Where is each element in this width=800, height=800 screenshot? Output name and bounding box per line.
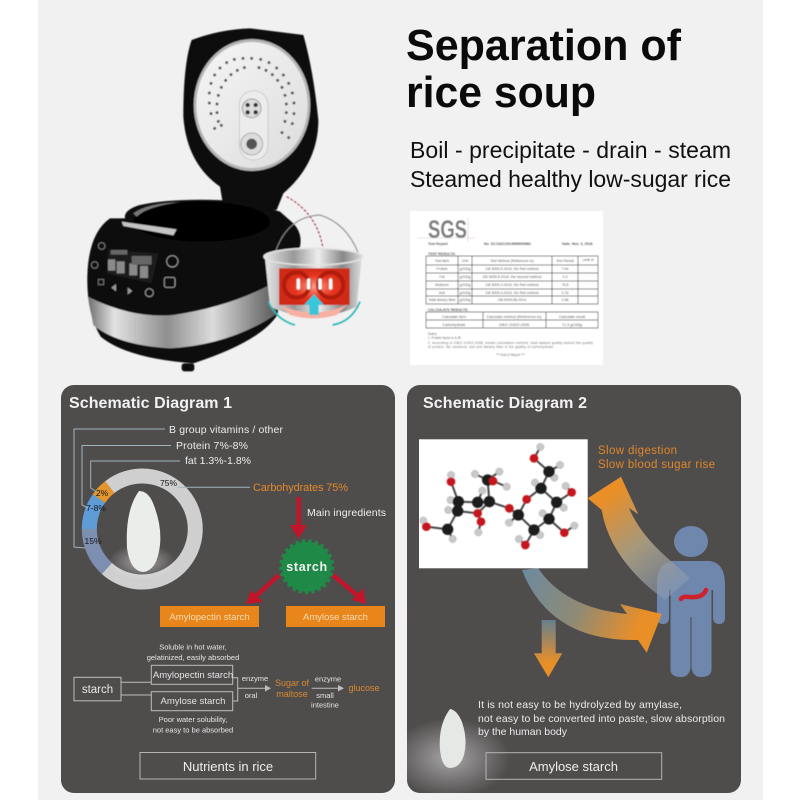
title: Separation of <box>406 21 681 70</box>
SGS test report document: GB 5009.6-2016, the second method <box>483 275 541 279</box>
SGS test report document: Limit of <box>582 258 594 262</box>
icon: rice grain <box>108 491 176 580</box>
composition labels: B group vitamins / other <box>169 424 284 436</box>
composition labels: Protein 7%-8% <box>176 440 248 452</box>
SGS test report document: 0.4 <box>562 275 568 279</box>
SGS test report document: g/100g <box>460 267 470 271</box>
SGS test report document: No. SZJ18111914059533981 <box>484 242 531 246</box>
text block: amylose description: It is not easy to be hydrolyzed by amylase, <box>478 699 682 711</box>
arrow: carbohydrates to starch <box>290 497 307 539</box>
arrow: starch to amylopectin <box>246 575 279 604</box>
SGS test report document: Total dietary fiber <box>428 298 456 302</box>
SGS test report document: CALCULATE RESULTS: <box>428 308 468 312</box>
icon: rice grain with glow <box>407 709 504 793</box>
SGS test report document: 7.64 <box>562 267 568 271</box>
flow diagram: starch digestion: small <box>316 691 334 700</box>
SGS test report document: 1. Protein factor is 6.25 <box>428 336 461 340</box>
flow diagram: starch digestion: oral <box>245 691 258 700</box>
flow diagram: starch digestion: Poor water solubility, <box>159 715 227 724</box>
SGS test report document: GB 5009.4-2016, the first method <box>485 291 539 295</box>
SGS test report document <box>410 211 603 365</box>
SGS test report document: TEST RESULTS: <box>428 252 456 256</box>
flow diagram: starch digestion <box>74 642 380 734</box>
SGS test report document: Fat <box>439 275 445 279</box>
label: carbohydrates 75%: Carbohydrates 75% <box>253 482 348 494</box>
box: amylose starch: Amylose starch <box>303 612 368 623</box>
SGS test report document: Ash <box>439 291 445 295</box>
text block: amylose description <box>478 699 725 738</box>
heading: schematic diagram 2: Schematic Diagram 2 <box>423 395 587 412</box>
SGS test report document: *** End of Report *** <box>496 353 526 357</box>
arrow: starch to amylose <box>333 575 366 604</box>
subtitle <box>410 137 731 192</box>
SGS test report document: GB/Z 21922-2008 <box>499 323 529 327</box>
SGS test report document: 2. According to GB/Z 21922-2008, known calculation method, total sample quality deduct the quality <box>428 341 593 345</box>
SGS test report document: of protein, fat, moisture, ash and dietary fiber is the quality of carbohydrate <box>428 345 553 349</box>
badge: starch <box>281 541 332 592</box>
donut chart: rice composition: 75% <box>160 478 177 488</box>
icon: stomach <box>681 590 706 599</box>
SGS test report document: Test Result <box>556 259 574 263</box>
heading: schematic diagram 1: Schematic Diagram 1 <box>69 395 232 412</box>
title <box>406 21 681 117</box>
SGS test report document: Notes: <box>428 332 437 336</box>
panel: schematic diagram 1 <box>61 385 395 793</box>
donut chart: rice composition: 2% <box>96 488 109 498</box>
subtitle: Boil - precipitate - drain - steam <box>410 137 731 163</box>
SGS test report document: GB 5009.88-2014 <box>498 298 526 302</box>
label: slow digestion: Slow blood sugar rise <box>598 459 715 471</box>
SGS test report document: Calculate result <box>559 315 586 319</box>
arrow: down to amylose <box>534 620 562 677</box>
SGS test report document: GB 5009.3-2016, the first method <box>485 283 539 287</box>
SGS test report document: Test item <box>435 259 449 263</box>
caption box: amylose starch <box>486 753 662 779</box>
flow diagram: starch digestion: Amylose starch <box>161 696 225 707</box>
composition labels <box>169 424 284 467</box>
SGS test report document: Date: Nov. 3, 2018 <box>562 242 592 246</box>
flow diagram: starch digestion: enzyme <box>315 674 341 684</box>
panel: schematic diagram 2 <box>390 385 741 798</box>
flow diagram: starch digestion: maltose <box>276 689 308 699</box>
caption box: amylose starch: Amylose starch <box>529 759 618 774</box>
flow diagram: starch digestion: Amylopectin starch <box>153 670 233 681</box>
SGS test report document: Carbohydrate <box>442 323 466 327</box>
arrow: toward the body <box>522 568 662 653</box>
SGS test report document: Protein <box>436 267 448 271</box>
flow diagram: starch digestion: gelatinized, easily absorbed <box>147 653 239 662</box>
donut chart: rice composition <box>84 476 195 582</box>
label: main ingredients: Main ingredients <box>307 507 386 519</box>
SGS test report document: 71.5 g/100g <box>562 323 582 327</box>
SGS test report document: g/100g <box>460 283 470 287</box>
donut chart: rice composition: 15% <box>84 536 102 546</box>
leader lines to labels <box>74 429 250 548</box>
box: amylopectin starch: Amylopectin starch <box>169 612 250 623</box>
SGS test report document: Unit <box>462 259 468 263</box>
molecule diagram <box>419 439 588 568</box>
SGS test report document: 75.6 <box>562 283 568 287</box>
flow diagram: starch digestion: starch <box>82 684 113 696</box>
composition labels: fat 1.3%-1.8% <box>185 455 251 467</box>
title: rice soup <box>406 68 596 117</box>
SGS test report document: Moisture <box>435 283 449 287</box>
caption box: nutrients in rice <box>140 752 316 779</box>
flow diagram: starch digestion: enzyme <box>242 674 268 683</box>
box: amylopectin starch <box>160 606 259 627</box>
badge: starch: starch <box>286 560 327 574</box>
label: slow digestion <box>598 445 715 471</box>
SGS test report document: Test Report <box>428 242 449 246</box>
text block: amylose description: not easy to be converted into paste, slow absorption <box>478 713 725 725</box>
flow diagram: starch digestion: Soluble in hot water, <box>159 642 227 652</box>
SGS test report document: g/100g <box>460 291 470 295</box>
SGS test report document: 2.68 <box>562 298 568 302</box>
icon: rice cooker with open lid and inner pot <box>87 28 363 371</box>
arrow: slow digestion upward <box>588 477 690 600</box>
SGS test report document: GB 5009.5-2016, the first method <box>485 267 539 271</box>
label: slow digestion: Slow digestion <box>598 445 677 457</box>
SGS test report document: Calculate method (Reference to) <box>487 315 542 319</box>
SGS test report document: g/100g <box>460 275 470 279</box>
donut chart: rice composition: 7-8% <box>86 503 106 513</box>
text block: amylose description: by the human body <box>478 726 568 738</box>
SGS test report document: SGS <box>428 216 467 244</box>
SGS test report document: g/100g <box>460 298 470 302</box>
SGS test report document: Calculate item <box>442 315 466 319</box>
flow diagram: starch digestion: intestine <box>311 700 339 710</box>
icon: human figure <box>657 526 725 677</box>
flow diagram: starch digestion: Sugar of <box>275 678 310 688</box>
box: amylose starch <box>286 606 385 627</box>
caption box: nutrients in rice: Nutrients in rice <box>183 759 273 774</box>
flow diagram: starch digestion: glucose <box>348 683 380 693</box>
flow diagram: starch digestion: not easy to be absorbed <box>153 726 233 734</box>
SGS test report document: 0.15 <box>562 291 568 295</box>
subtitle: Steamed healthy low-sugar rice <box>410 166 731 192</box>
SGS test report document: Test Method (Reference to) <box>490 259 534 263</box>
